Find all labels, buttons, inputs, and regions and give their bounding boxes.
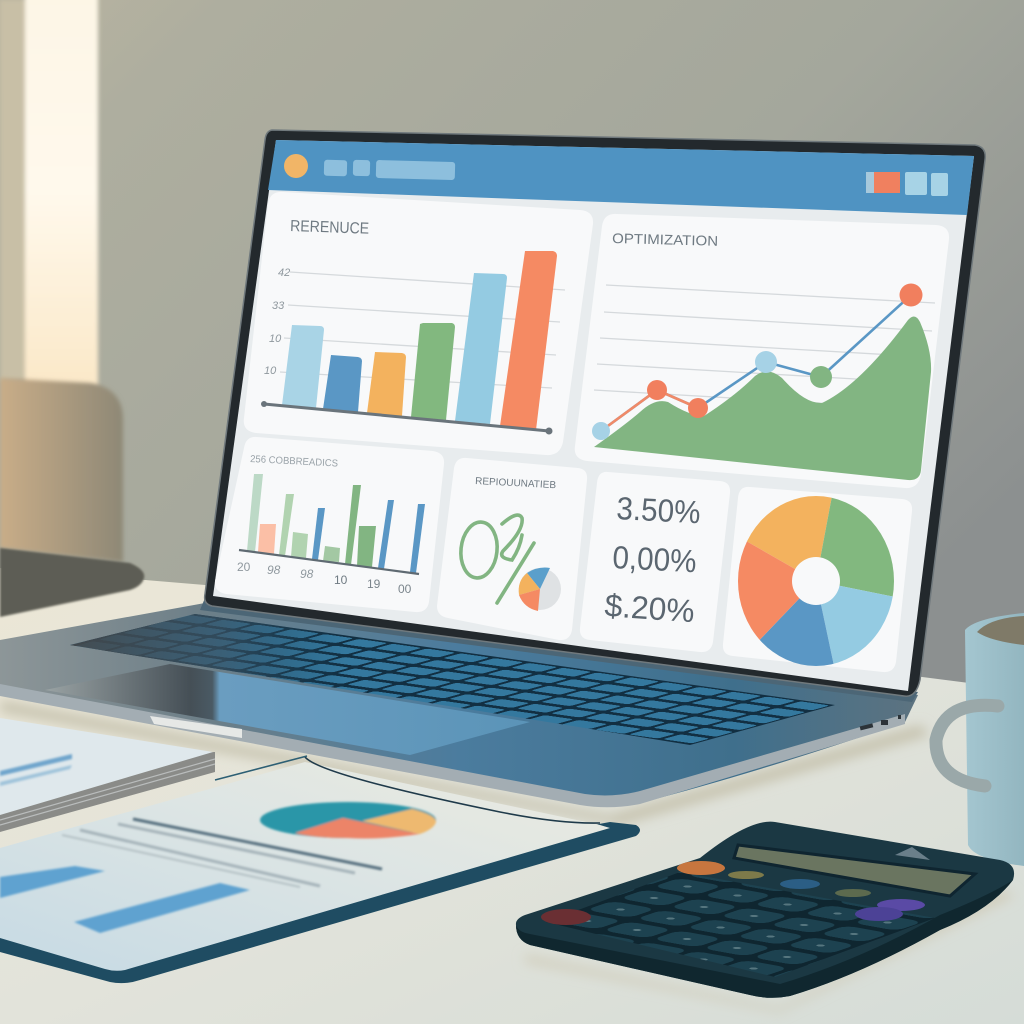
mug (936, 613, 1024, 866)
panel: percentage values (580, 472, 730, 652)
calculator body (516, 822, 1014, 998)
y axis labels: 10 (264, 365, 277, 377)
colored keys (541, 861, 925, 925)
header buttons (866, 172, 874, 193)
grid lines (594, 285, 935, 409)
y axis labels: 33 (272, 300, 285, 312)
strap (305, 757, 600, 823)
bars (247, 474, 425, 573)
screen hinge (200, 598, 918, 702)
wall background (0, 0, 1024, 700)
axis (239, 550, 419, 574)
dark tablet on desk (0, 548, 144, 617)
laptop base (0, 603, 918, 807)
revenue heading: RERENUCE (290, 218, 369, 238)
donut (738, 496, 894, 666)
values (604, 490, 701, 629)
mini pie (519, 568, 561, 611)
keypad (546, 872, 935, 977)
x labels: 19 (367, 577, 381, 591)
logo dot (284, 154, 308, 178)
x labels: 00 (398, 582, 412, 596)
y axis labels: 42 (278, 267, 290, 279)
desk (0, 568, 1024, 1024)
screen header bar (268, 140, 974, 215)
ports (860, 715, 901, 730)
panel: small bar chart (215, 437, 444, 612)
x labels: 98 (267, 563, 281, 577)
optimization heading: OPTIMIZATION (612, 230, 718, 249)
x labels: 20 (237, 560, 251, 574)
mug opening (977, 616, 1024, 645)
laptop shadow (0, 700, 930, 825)
values: 3.50% (616, 490, 701, 530)
green area (594, 316, 931, 480)
data points (592, 284, 922, 440)
window light (0, 0, 98, 387)
screen (213, 140, 974, 691)
panel: pie chart (723, 487, 912, 672)
report bars (0, 754, 72, 786)
trend line (601, 295, 911, 431)
document bars (0, 866, 250, 933)
panel: optimization chart (575, 214, 949, 488)
sofa (0, 378, 123, 562)
document folder (0, 756, 640, 983)
bars (282, 251, 557, 430)
mug handle (936, 705, 998, 786)
x labels (237, 560, 412, 596)
panel: revenue chart (244, 192, 593, 455)
keyboard (70, 614, 835, 745)
laptop (0, 130, 985, 825)
screen bezel (205, 130, 985, 696)
calculator shadow (525, 890, 1015, 1012)
folder cover (0, 822, 640, 983)
small chart heading: 256 COBBREADICS (250, 454, 339, 470)
values: $.20% (604, 587, 696, 629)
text lines (62, 819, 382, 887)
y axis labels (264, 267, 290, 377)
x labels: 10 (334, 573, 348, 587)
grid lines (280, 272, 565, 388)
rate heading: REPIOUUNATIEB (475, 476, 557, 491)
display (734, 845, 975, 896)
calculator front edge (516, 880, 1013, 998)
trackpad (45, 664, 530, 755)
nav pills (324, 160, 347, 176)
panel: rate gauge (437, 458, 587, 640)
solar cap (895, 847, 930, 860)
base front edge (0, 684, 905, 807)
stack of reports (0, 718, 215, 832)
calculator (516, 822, 1015, 1012)
x labels: 98 (300, 567, 314, 581)
big number (458, 515, 534, 603)
values: 0,00% (612, 539, 697, 579)
y axis labels: 10 (269, 333, 282, 345)
front notch (150, 716, 242, 738)
document pie chart (260, 802, 436, 838)
x axis (261, 401, 552, 434)
mug body (965, 613, 1024, 866)
